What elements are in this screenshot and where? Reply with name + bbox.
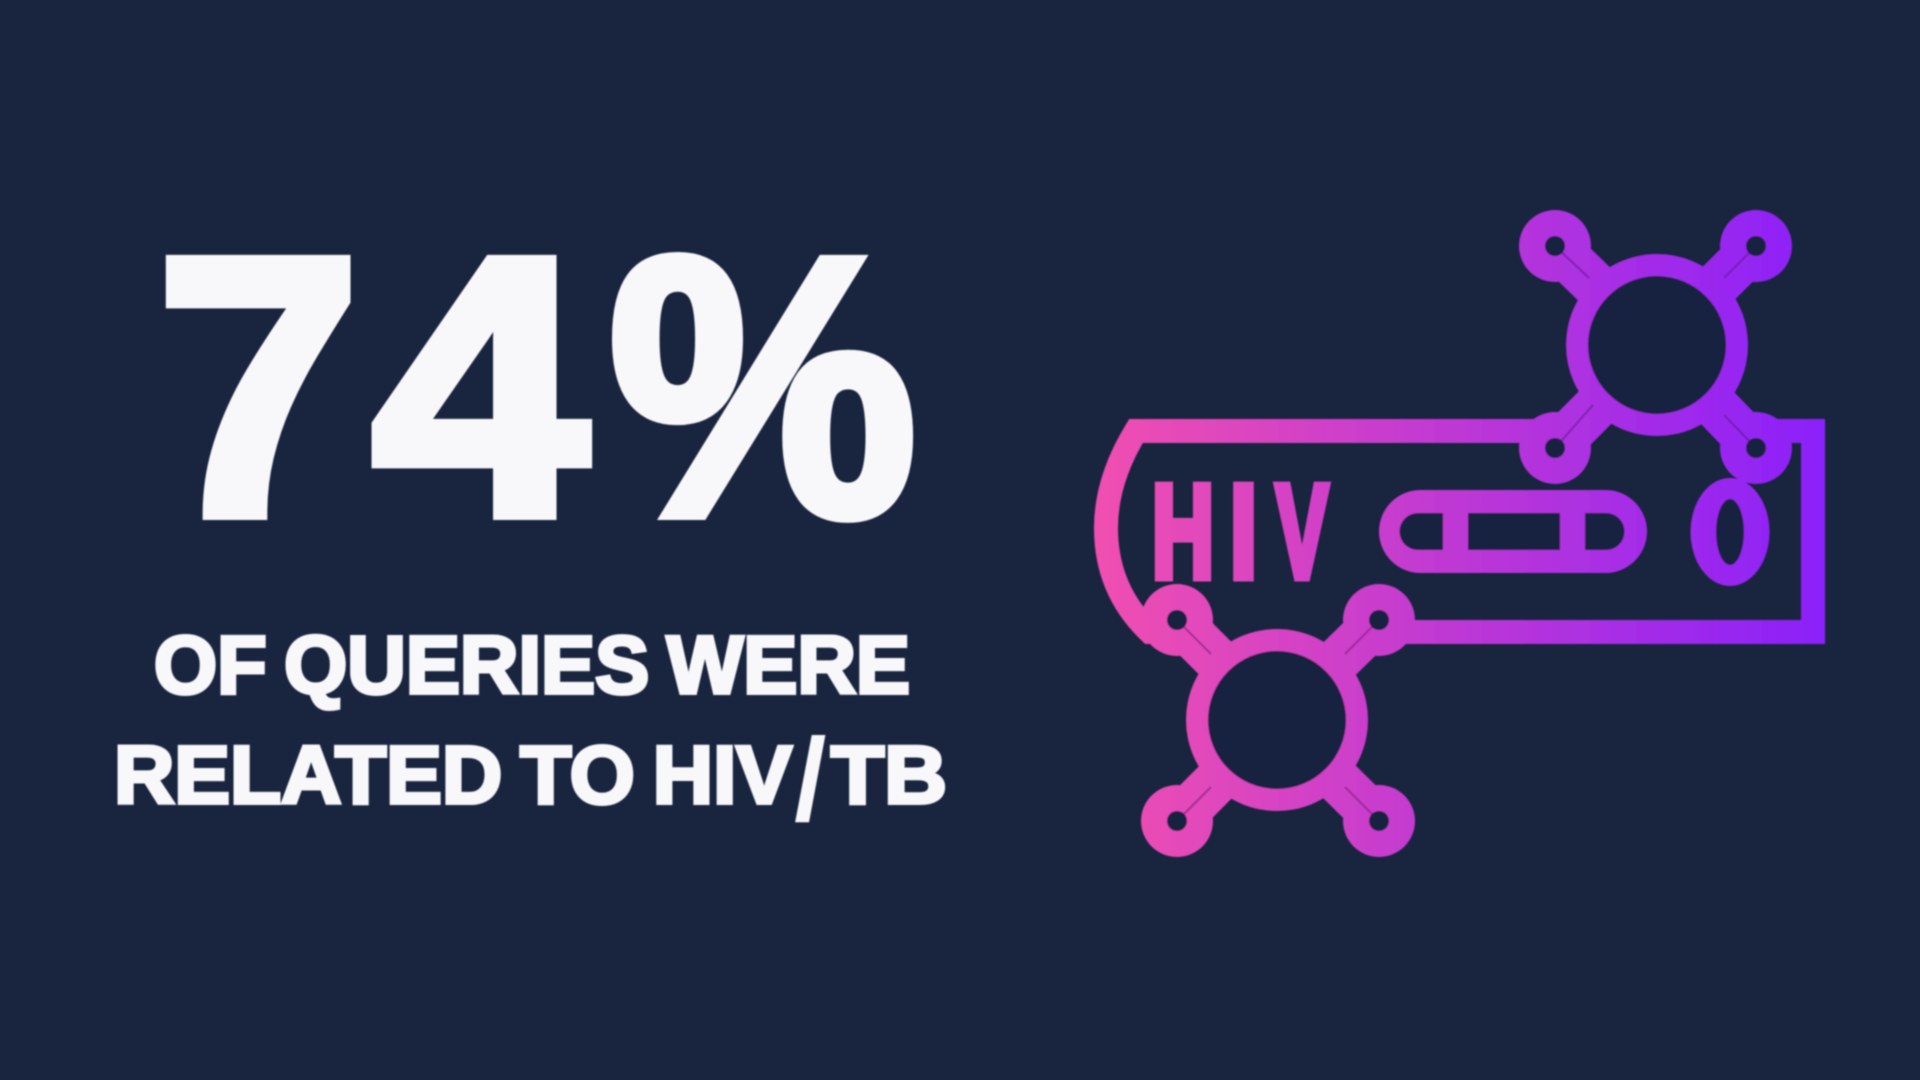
big statistic: 74%: 4 [372, 182, 590, 593]
HIV label on strip: V [1276, 458, 1328, 605]
test window pill [1379, 490, 1647, 573]
caption line 2 [114, 714, 947, 845]
HIV label on strip: H [1152, 458, 1214, 605]
sample well oval [1690, 478, 1770, 586]
HIV label on strip: I [1230, 458, 1257, 605]
big statistic: 74% [156, 181, 917, 593]
caption line 2: / [794, 714, 827, 845]
big statistic: 74%: 7 [156, 181, 361, 592]
caption line 2: RELATED TO HIV [114, 730, 792, 821]
virus particle: lower left [1141, 584, 1415, 857]
caption line 2: TB [831, 730, 947, 821]
test strip outline [1106, 431, 1813, 632]
virus particle: upper right [1519, 210, 1792, 484]
HIV label on strip [1152, 458, 1328, 605]
caption line 1: OF QUERIES WERE [154, 620, 910, 711]
big statistic: 74%: % [609, 181, 917, 592]
caption: of queries were related to HIV/TB [114, 620, 947, 845]
icon: HIV test strip with virus particles [1106, 210, 1813, 857]
